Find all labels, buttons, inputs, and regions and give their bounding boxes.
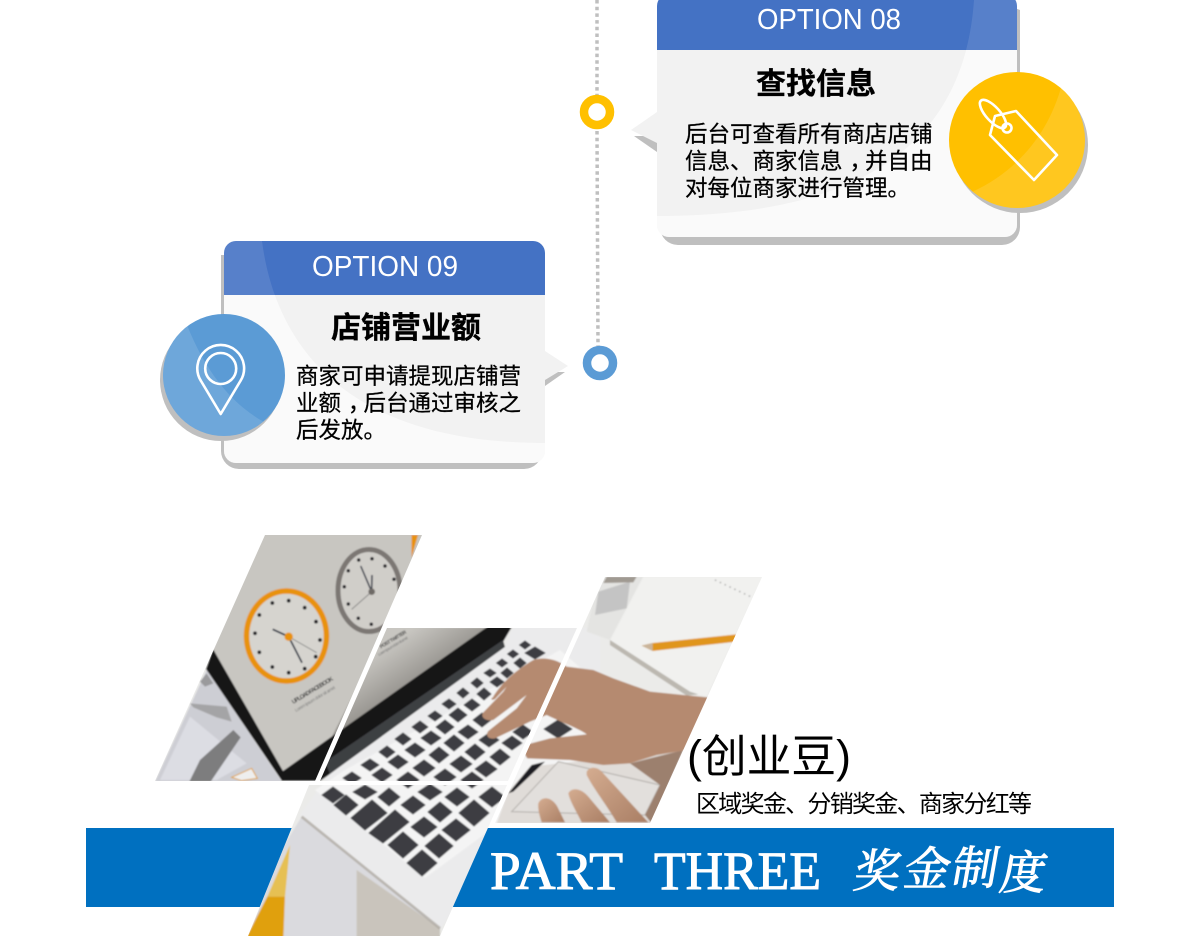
option 08 label: OPTION 08: [757, 4, 901, 36]
timeline node: option 09: [587, 350, 613, 376]
desk map sheet: [155, 670, 282, 782]
timeline node: option 08: [584, 99, 610, 125]
notebook and pencil: [587, 577, 763, 697]
option 09 body text: 商家可申请提现店铺营: [296, 364, 521, 389]
banner title: PART: [490, 841, 623, 901]
option 09 body text: 后发放。: [296, 418, 386, 443]
banner calligraphy title: 金: [900, 833, 957, 899]
subtitle: chuangye beans: (创业豆): [687, 731, 851, 782]
option 08 body text: 后台可查看所有商店店铺: [685, 122, 933, 147]
photo collage: laptop on desk: [150, 530, 770, 940]
banner calligraphy title: 制: [948, 832, 1005, 898]
laptop deck: [330, 648, 504, 774]
option 09 body text: 业额 ，后台通过审核之: [296, 391, 521, 416]
timeline dotted line: [597, 0, 598, 346]
laptop bezel: [206, 625, 513, 781]
blue banner: [86, 828, 1114, 907]
laptop screen with clocks: POST TWITTER: [379, 629, 408, 650]
laptop screen with clocks: [214, 535, 487, 772]
keyboard tray: [316, 652, 583, 876]
keyboard hinge: [325, 640, 505, 774]
option 09 label: OPTION 09: [312, 251, 458, 283]
panel: option 08: [631, 0, 1100, 260]
banner title: [490, 832, 1053, 903]
icon: map pin: [160, 314, 285, 441]
banner title: THREE: [654, 841, 821, 901]
icon: price tag: [949, 72, 1088, 213]
hand: [482, 659, 710, 822]
option 08 body text: [685, 122, 933, 201]
description text: 区域奖金、分销奖金、商家分红等: [696, 791, 1032, 818]
option 08 heading: 查找信息: [756, 68, 876, 101]
banner calligraphy title: 奖: [850, 835, 907, 901]
option 08 body text: 信息、商家信息 ，并自由: [685, 149, 933, 174]
laptop screen with clocks: UPLOAD FACEBOOK: [291, 676, 335, 706]
keyboard keys: [322, 641, 582, 876]
option 08 body text: 对每位商家进行管理。: [685, 176, 910, 201]
option 09 body text: [296, 364, 521, 443]
banner calligraphy title: 度: [996, 837, 1053, 903]
banner calligraphy title: [850, 832, 1053, 903]
desk foreground: [245, 817, 440, 940]
laptop screen with clocks: Lorem ipsum dolor sit amet: [377, 635, 409, 657]
panel: option 09: [150, 241, 568, 480]
option 09 heading: 店铺营业额: [331, 312, 481, 345]
laptop screen with clocks: Lorem ipsum dolor sit amet: [294, 685, 337, 713]
touchpad and palm rest: [497, 750, 683, 823]
